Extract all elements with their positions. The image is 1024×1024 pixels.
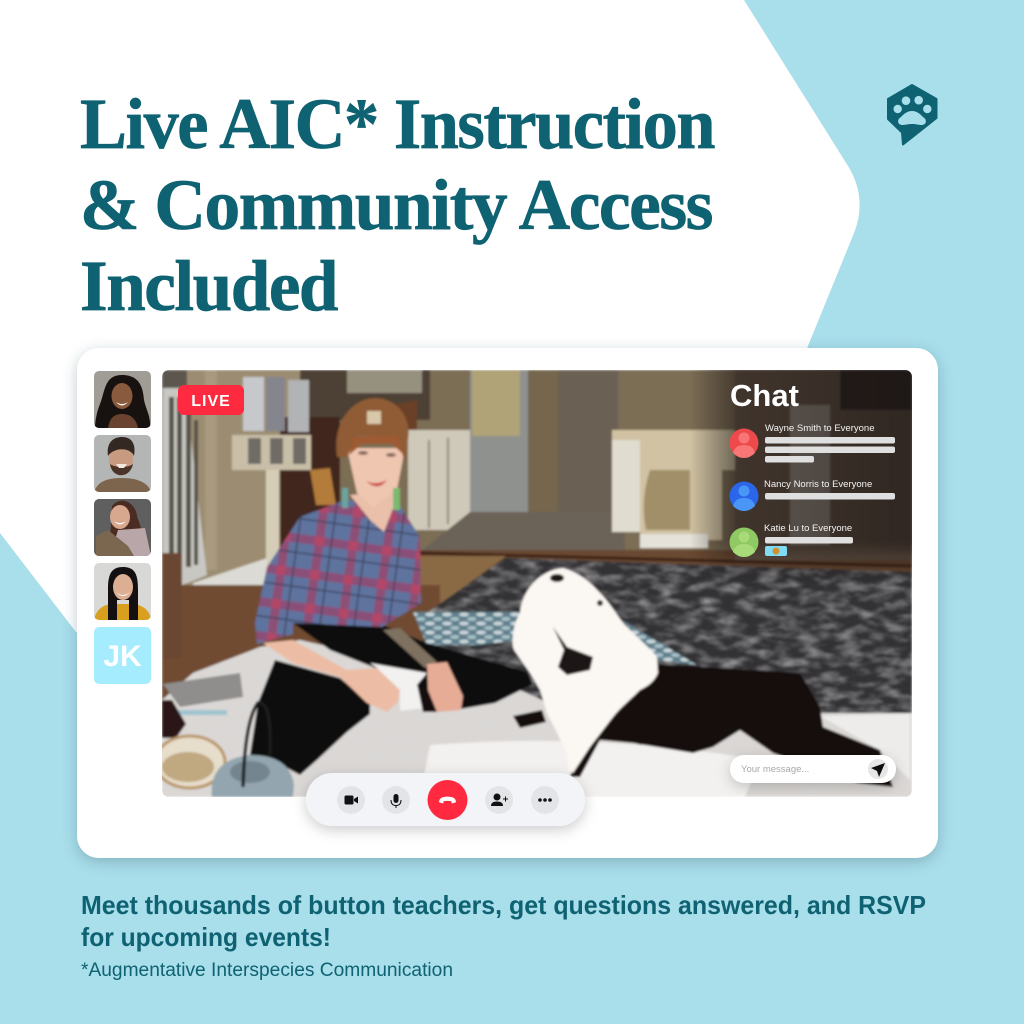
caption text: for upcoming events! — [81, 922, 331, 952]
wood floor — [424, 512, 625, 550]
gumball dispensers — [232, 435, 311, 470]
message input: Your message... — [741, 764, 809, 775]
participant thumbnail 3 — [94, 499, 151, 556]
white rug — [162, 640, 912, 797]
title: & Community Access — [80, 165, 712, 245]
chat heading: Chat — [730, 378, 799, 413]
hand — [427, 662, 463, 712]
shirt — [255, 500, 421, 644]
icon: more — [531, 786, 559, 814]
icon: hang up — [428, 780, 468, 820]
icon: camera — [337, 786, 365, 814]
leggings — [293, 623, 533, 710]
footnote: *Augmentative Interspecies Communication — [81, 960, 453, 981]
chat message 2: Nancy Norris to Everyone — [764, 479, 872, 490]
counter — [612, 430, 735, 540]
participant tile JK — [94, 627, 151, 684]
chat message 3 — [730, 523, 853, 557]
participant thumbnail 1 — [94, 371, 151, 428]
chat message 2 — [730, 479, 895, 511]
live badge: LIVE — [191, 393, 231, 410]
participant tile JK: JK — [103, 640, 142, 673]
participant thumbnail 2 — [94, 435, 151, 492]
participant thumbnail 4 — [94, 563, 151, 620]
chat message 1: Wayne Smith to Everyone — [765, 423, 874, 434]
baseboard — [193, 558, 267, 590]
dog — [570, 664, 893, 787]
chat message 3: Katie Lu to Everyone — [764, 523, 852, 534]
icon: microphone — [382, 786, 410, 814]
carpet — [424, 558, 912, 724]
door and curtain — [470, 370, 528, 512]
head and hat — [349, 492, 395, 533]
baby gate — [163, 388, 207, 587]
video call card — [77, 348, 938, 858]
chat message 1 — [730, 423, 895, 462]
call controls bar — [306, 773, 585, 826]
chat panel — [730, 378, 895, 557]
left floor — [162, 585, 440, 700]
live badge — [178, 385, 244, 415]
icon: add person — [485, 786, 513, 814]
dog paw / sock — [370, 663, 427, 711]
title — [80, 84, 714, 326]
chat overlay panel — [690, 370, 912, 585]
arm — [263, 640, 400, 712]
kitchen cabinets — [408, 430, 470, 530]
message input — [730, 755, 896, 783]
caption text — [81, 890, 926, 952]
video scene — [155, 370, 912, 797]
bowls and toys — [163, 673, 243, 707]
caption text: Meet thousands of button teachers, get questions answered, and RSVP — [81, 890, 926, 920]
title: Included — [80, 246, 338, 326]
icon: paw speech bubble logo — [888, 85, 936, 144]
white angular background shape — [0, 0, 860, 640]
button mat — [413, 612, 522, 645]
title: Live AIC* Instruction — [80, 84, 714, 164]
doorway — [558, 370, 618, 516]
icon: send — [871, 763, 885, 777]
